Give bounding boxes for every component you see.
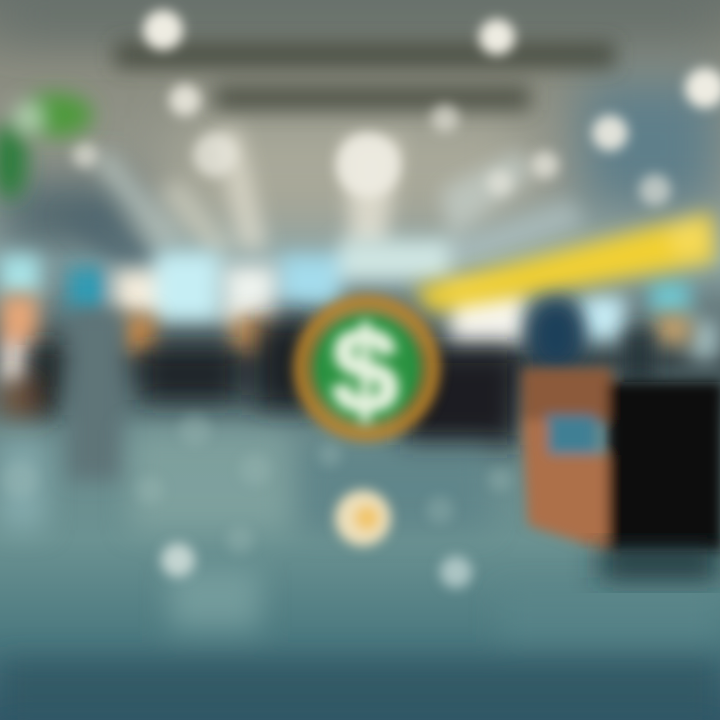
- floor mottling: [2, 414, 512, 554]
- dark mid band: [0, 320, 520, 445]
- floor reflections: [0, 430, 720, 720]
- heading: blurred title lines: [115, 42, 615, 110]
- shop counters: [0, 295, 690, 385]
- yellow banner: [415, 212, 716, 312]
- glowing shop band: [0, 240, 720, 360]
- dollar sign: $: [332, 304, 398, 438]
- counter: wood front and dark desk: [522, 368, 720, 552]
- icon: dollar coin: [301, 302, 433, 438]
- people at right: [528, 299, 653, 380]
- pillar: [68, 310, 124, 480]
- floor light spots: [161, 490, 472, 588]
- ceiling lights: [72, 10, 720, 206]
- plant: [0, 93, 93, 200]
- ceiling tones: [0, 0, 720, 250]
- ceiling light rays: [60, 130, 585, 270]
